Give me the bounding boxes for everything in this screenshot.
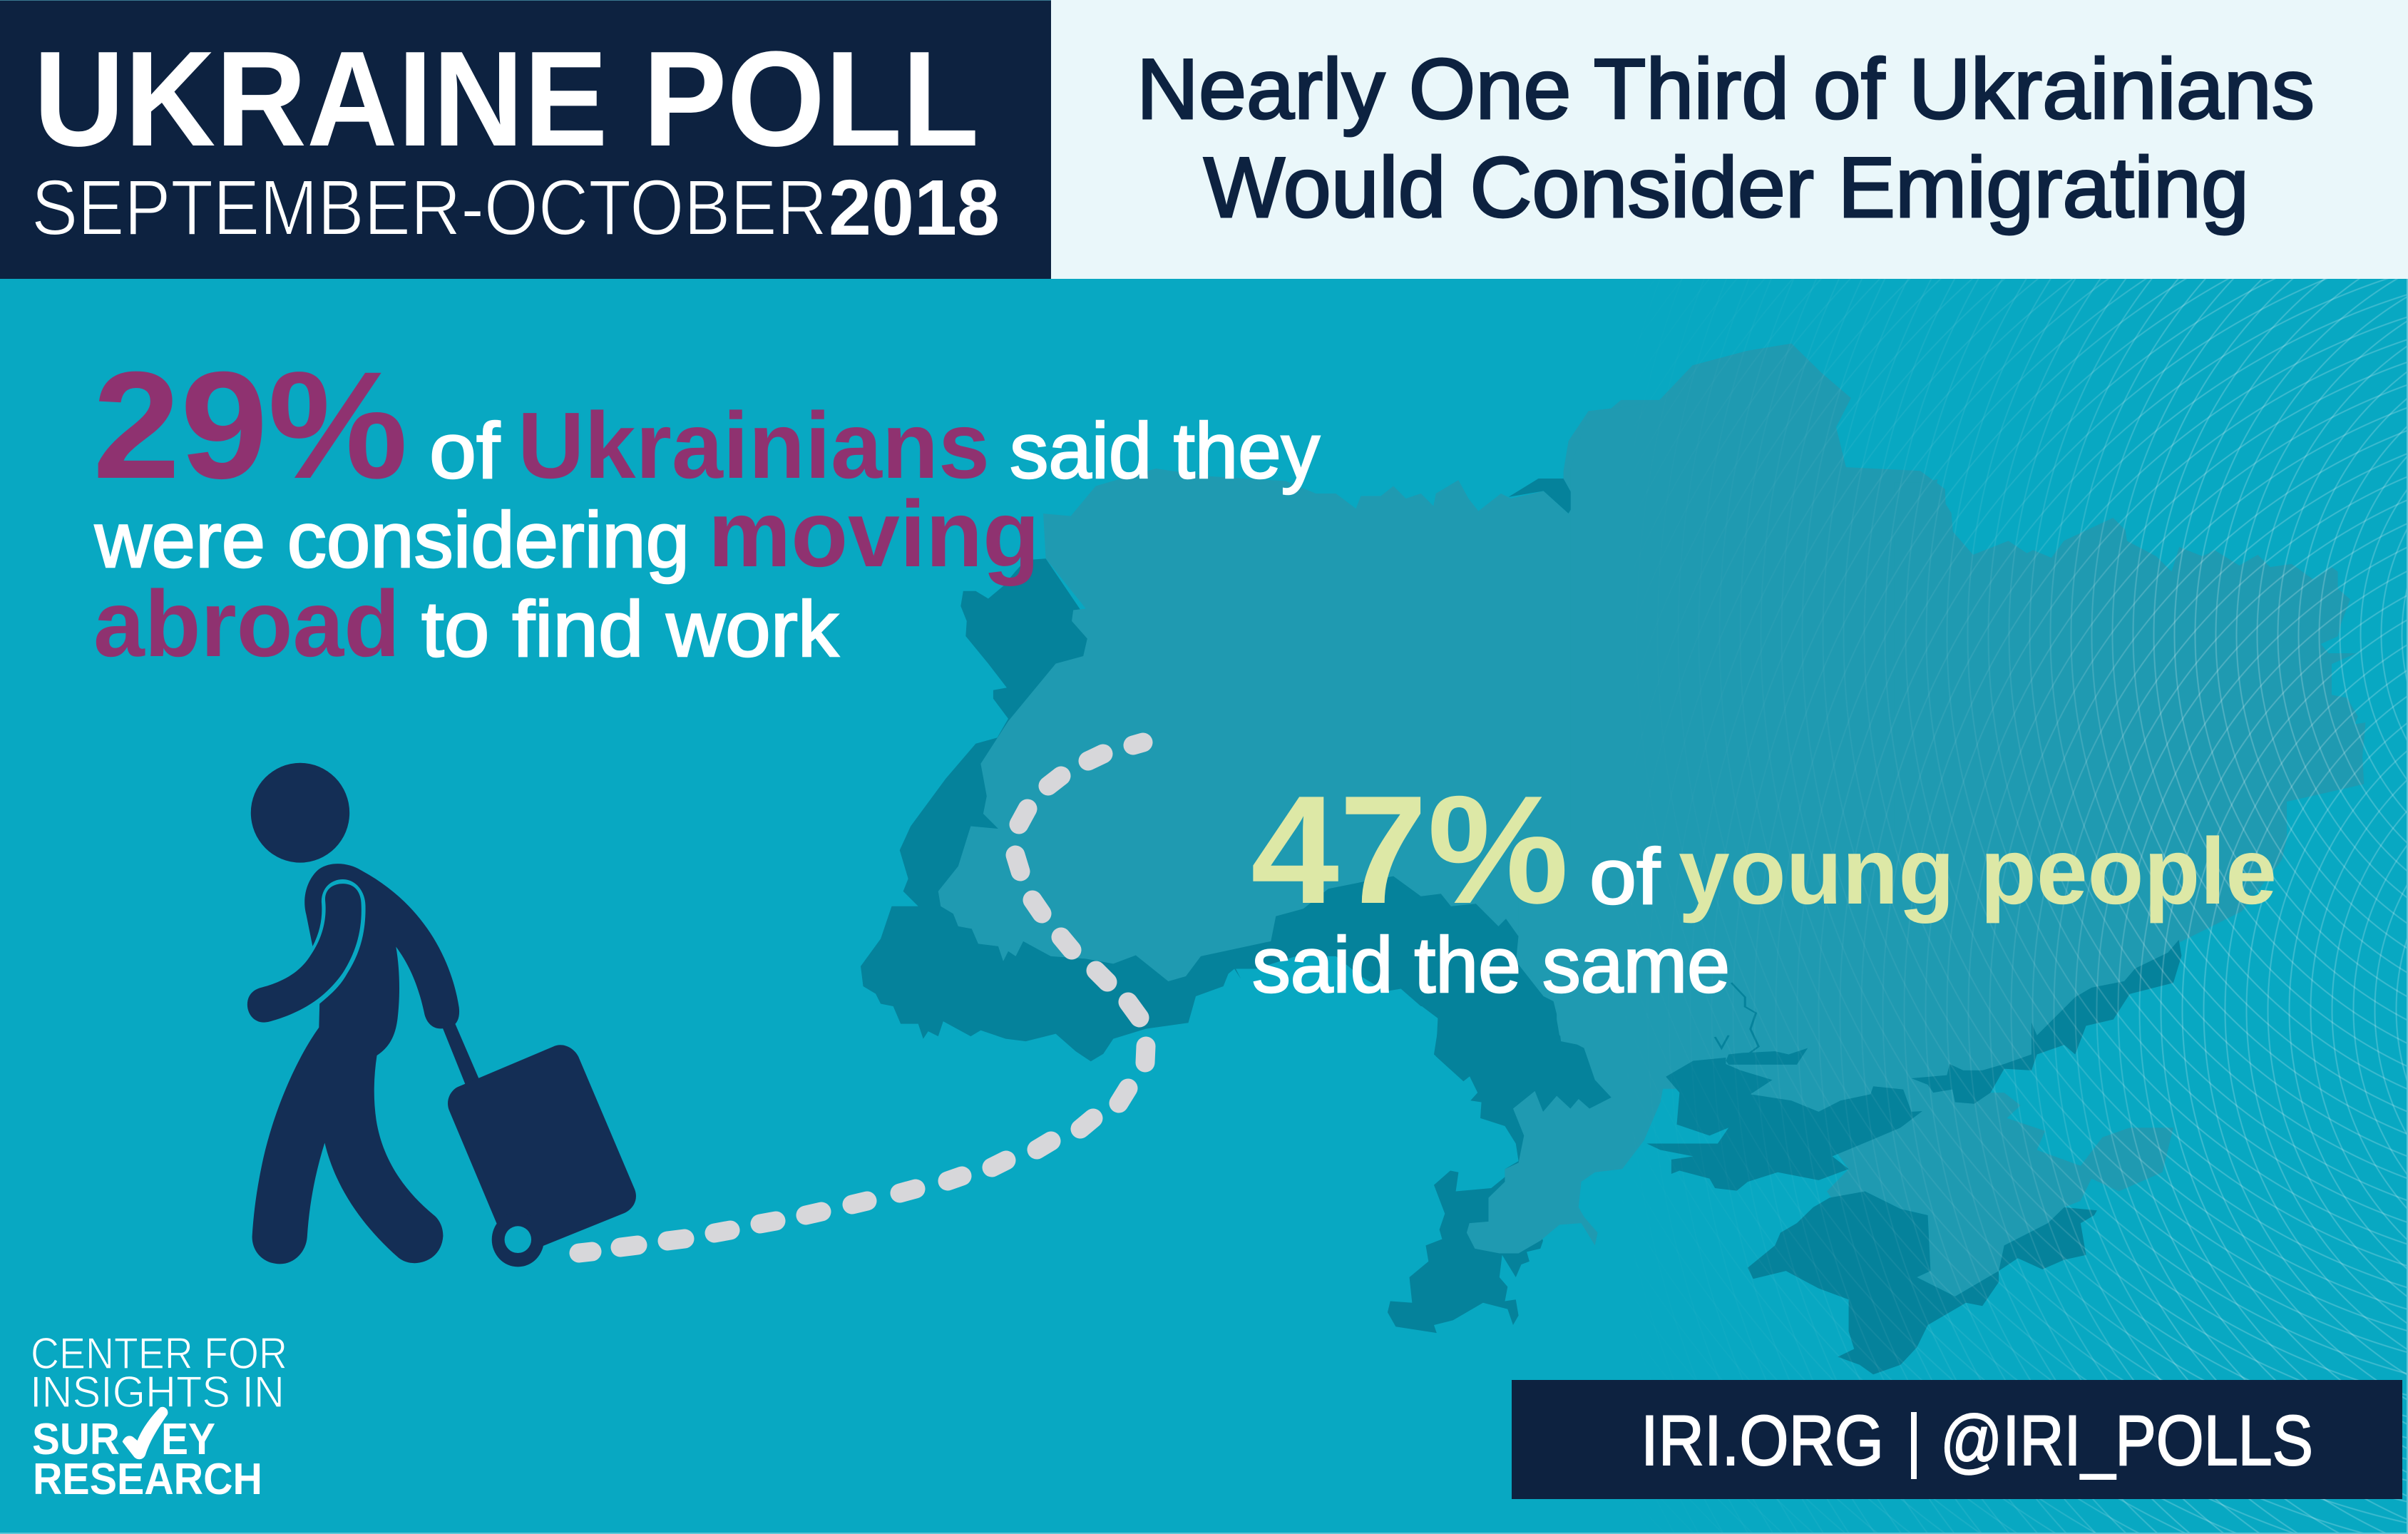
map: southern land and band xyxy=(1467,832,2210,1297)
title: UKRAINE POLL xyxy=(34,24,979,175)
headline line 1: Nearly One Third of Ukrainians xyxy=(1137,41,2315,137)
map: dark Kherson shadow xyxy=(1646,1058,1922,1191)
dashed travel path xyxy=(579,742,1146,1253)
logo line 2: INSIGHTS IN xyxy=(30,1368,285,1417)
map: dark estuary strip xyxy=(1726,1048,1808,1065)
icon: wheel xyxy=(492,1212,544,1267)
subtitle dates: SEPTEMBER-OCTOBER xyxy=(31,164,827,252)
map: dark Azov coast strip xyxy=(1912,940,2181,1104)
icon: suitcase xyxy=(448,1045,636,1246)
icon: suitcase handle xyxy=(443,1024,478,1085)
of: of xyxy=(429,407,500,495)
map: northern land xyxy=(1571,344,1965,1013)
map of Ukraine xyxy=(861,344,2365,1374)
statistic block: 47 percent xyxy=(1251,763,2277,1009)
icon: arm xyxy=(247,884,362,1023)
map: river line xyxy=(1715,983,1758,1055)
header panel: ukraine poll xyxy=(0,0,1051,279)
icon: head xyxy=(251,763,349,863)
were considering: were considering xyxy=(94,496,690,584)
to find work: to find work xyxy=(421,586,839,673)
logo SUR: SUR xyxy=(32,1415,120,1464)
big number 47%: 47% xyxy=(1251,763,1569,936)
subtitle year: 2018 xyxy=(829,164,1000,252)
separator bar xyxy=(1911,1412,1917,1479)
map: main western land xyxy=(938,400,1681,1089)
headline line 2: Would Consider Emigrating xyxy=(1204,140,2249,235)
header panel: headline xyxy=(1051,0,2408,279)
map: eastern land xyxy=(1895,479,2365,944)
said the same: said the same xyxy=(1252,921,1730,1009)
logo RESEARCH: RESEARCH xyxy=(33,1455,262,1504)
website: IRI.ORG xyxy=(1641,1401,1884,1480)
said they: said they xyxy=(1010,407,1320,495)
logo: center for insights in survey research xyxy=(30,1329,287,1504)
Ukrainians: Ukrainians xyxy=(518,393,990,498)
young people: young people xyxy=(1679,819,2277,924)
map: dark western shadow xyxy=(861,558,1611,1091)
big number 29%: 29% xyxy=(93,340,408,511)
abroad: abroad xyxy=(93,571,400,676)
map: dark lake notch xyxy=(1508,479,1576,513)
logo line 1: CENTER FOR xyxy=(31,1329,287,1379)
icon: body xyxy=(252,864,459,1264)
moving: moving xyxy=(708,481,1040,586)
map: dark Crimea shadow xyxy=(1748,1192,2097,1374)
map: dark Odessa shadow xyxy=(1388,927,1612,1333)
logo EY: EY xyxy=(161,1415,215,1464)
icon: traveller with suitcase xyxy=(247,763,636,1267)
statistic block: 29 percent xyxy=(93,340,1320,676)
moire line pattern xyxy=(1705,279,2407,1533)
logo checkmark xyxy=(123,1407,168,1459)
footer box xyxy=(1512,1380,2402,1499)
of: of xyxy=(1589,833,1660,921)
twitter handle: @IRI_POLLS xyxy=(1940,1401,2313,1480)
